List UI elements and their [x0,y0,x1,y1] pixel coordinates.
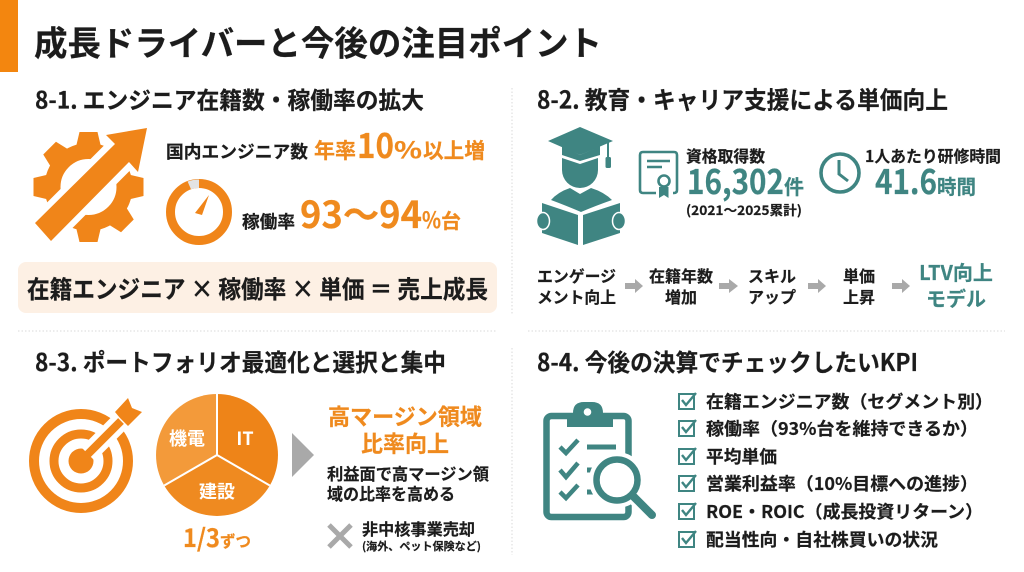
text: high margin: 利益面で高マージン領 [327,461,489,485]
stat: training hours: 1人あたり研修時間 [865,143,1001,167]
label: one third each: 1/3 [183,519,220,555]
panel: 8-4 KPI [537,343,993,552]
text: utilisation rate: 稼働率 [242,209,295,234]
text: domestic engineers: 年率 [314,135,356,165]
arrow 1 [625,279,643,293]
panel: 8-2 education [536,80,1001,312]
icon: gear with arrow [25,120,155,250]
stat: certifications: (2021〜2025累計) [686,200,802,219]
stat: certifications: 資格取得数 [686,143,765,167]
item 4: 営業利益率（10%目標への進捗） [706,471,978,496]
chart: pie thirds: IT [236,425,254,451]
icon: certificate [640,152,677,198]
text: utilisation rate [242,185,461,239]
item 1: 在籍エンジニア数（セグメント別） [706,389,993,414]
item 2: 稼働率（93%台を維持できるか） [706,416,978,441]
item 5: ROE・ROIC（成長投資リターン） [706,499,983,524]
icon: clock [821,154,859,192]
step: skill up [748,263,796,308]
panel: 8-1 engineers [18,82,497,313]
text: high margin: 比率向上 [361,427,449,459]
stat: certifications: 件 [784,171,804,200]
label: one third each: ずつ [220,528,251,552]
panel: 8-3 portfolio [34,343,489,555]
step: skill up: スキル [748,263,796,287]
heading 8-1: 8-1. エンジニア在籍数・稼働率の拡大 [35,82,424,116]
step: LTV model: LTV向上 [919,257,993,286]
step: skill up: アップ [748,284,796,308]
text: high margin [327,400,489,505]
flow: LTV model [537,257,993,312]
text: non-core divestiture [362,516,481,554]
text: domestic engineers [166,119,485,168]
stat: training hours [865,143,1001,204]
text: domestic engineers: % [394,133,422,165]
stat: certifications: 16,302 [687,155,784,204]
step: tenure [649,263,713,308]
step: price rise [843,263,875,308]
callout: formula: 在籍エンジニア × 稼働率 × 単価 ＝ 売上成長 [27,271,488,306]
checklist [679,389,993,552]
item 6: 配当性向・自社株買いの状況 [706,527,939,552]
chart: pie thirds [156,394,278,516]
text: utilisation rate: 台 [441,205,461,234]
text: non-core divestiture: 非中核事業売却 [362,516,475,540]
step: engagement: エンゲージ [537,263,616,287]
chart: pie thirds: 建設 [199,478,235,504]
chart: pie thirds: 機電 [169,425,205,451]
stat: certifications [686,143,804,219]
label: one third each [183,519,251,555]
icon: graduate reading [536,127,626,245]
heading 8-2: 8-2. 教育・キャリア支援による単価向上 [537,80,948,116]
text: non-core divestiture: (海外、ペット保険など) [362,538,481,554]
text: domestic engineers: 10 [357,119,394,168]
arrow 3 [808,279,826,293]
title band: 成長ドライバーと今後の注目ポイント [34,16,602,66]
text: high margin: 域の比率を高める [327,481,455,505]
arrow 4 [892,279,910,293]
icon: utilisation gauge [170,179,228,240]
title band [0,0,602,72]
text: utilisation rate: % [422,203,441,235]
text: high margin: 高マージン領域 [328,400,482,432]
text: utilisation rate: 93〜94 [300,185,422,239]
icon: target with arrow [34,398,142,508]
arrow 2 [719,279,738,293]
callout: formula [18,262,497,313]
text: domestic engineers: 以上増 [423,135,485,165]
step: price rise: 単価 [843,263,875,287]
step: LTV model: モデル [926,283,986,312]
heading 8-4: 8-4. 今後の決算でチェックしたいKPI [537,343,918,378]
icon: clipboard with magnifier [546,402,656,519]
step: tenure: 増加 [665,284,697,308]
step: tenure: 在籍年数 [649,263,713,287]
step: price rise: 上昇 [843,284,875,308]
text: domestic engineers: 国内エンジニア数 [166,139,309,164]
stat: training hours: 時間 [937,171,976,200]
step: engagement: メント向上 [537,284,616,308]
step: LTV model [919,257,993,312]
heading 8-3: 8-3. ポートフォリオ最適化と選択と集中 [35,343,446,378]
icon: cross [329,525,351,547]
stat: training hours: 41.6 [875,155,937,204]
step: engagement [537,263,616,308]
item 3: 平均単価 [706,444,777,469]
arrow: triangle [292,433,314,477]
